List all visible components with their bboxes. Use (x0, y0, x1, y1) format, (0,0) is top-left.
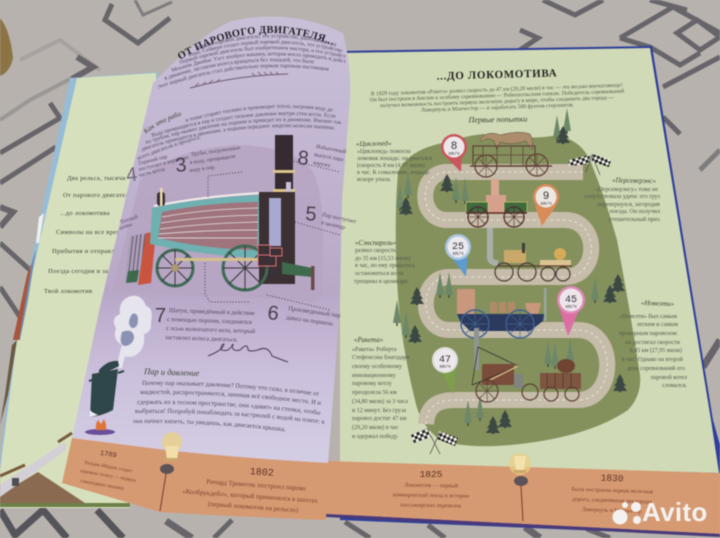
step 7 (155, 263, 330, 344)
label: Novelty: день соревнований его (627, 365, 685, 372)
label: Rocket: (29,20 мили) в час (352, 424, 399, 431)
step 8: Избыточный (316, 143, 347, 155)
trees (393, 108, 627, 434)
year 1830: 1830 (600, 473, 624, 484)
pin: 25 km/h: КМ/Ч (453, 251, 464, 257)
label: Cycloped: ломовая лошадь: он двигался (357, 156, 432, 162)
contents list: Два рельса, тысячи (67, 175, 126, 182)
lamp 1825 (509, 453, 531, 521)
contents list: ...до локомотива (60, 210, 110, 217)
pin: 47 km/h (432, 347, 458, 394)
paragraph: steam and pressure: она начнет кипеть, ты увидишь, как двигается крышка. (132, 419, 286, 432)
step 4: часть котла (138, 166, 166, 179)
step 8 (288, 143, 347, 172)
step 2 (119, 213, 139, 232)
year 1802: 1802 (249, 467, 274, 480)
step 3: 3 (174, 154, 188, 177)
label: Cycloped (356, 139, 432, 183)
ornament: swirl divider (208, 344, 288, 362)
icon: checkered flags, start (569, 154, 611, 175)
label: Sans Pareil: трещины в цилиндре. (354, 279, 410, 285)
text 1825: пассажирских перевозок (400, 502, 462, 510)
icon: gold object in the corner (0, 18, 13, 76)
ornament: laurel divider (190, 72, 288, 88)
pin: 25 km/h: 25 (452, 242, 464, 253)
paragraph: steam and pressure: сдержать их в тесном пространстве, они «давят» на стенки, чтобы (136, 400, 321, 415)
label: Novelty (619, 299, 687, 389)
pin: 9 km/h: КМ/Ч (541, 201, 552, 207)
firebox (125, 232, 156, 285)
contents list: Прибытия и отправления (52, 248, 128, 255)
contents list: Символы на все времена (56, 229, 131, 236)
label: Rocket: (34,80 мили) за 3 часа (352, 398, 408, 405)
text 1830: дорога, соединившая два города (572, 497, 652, 505)
lamp 1802 (160, 432, 182, 511)
pin: 45 km/h: КМ/Ч (566, 304, 577, 310)
label: Rocket: преодолела 56 км (352, 390, 397, 396)
intro paragraph, right page (369, 82, 625, 115)
label: Sans Pareil: развил скорость (355, 248, 396, 254)
step 8: 8 (296, 147, 310, 170)
text 1825: Локомотив — первый (404, 482, 458, 489)
paragraph: how it works (137, 104, 342, 160)
paragraph: steam and pressure: выбраться! Попробуй понаблюдать за кастрюлей с водой на плите: когда (134, 408, 325, 424)
step 5: Пар поступает (322, 212, 357, 225)
step 3: в воду, превращали (189, 154, 236, 166)
paragraph: how it works: двигатель приводится в движение, а поршни передают энергию колесам машины. (142, 124, 335, 152)
label: Novelty: «Новелти» (641, 299, 675, 308)
panel: orange timeline strip, left page (62, 432, 328, 520)
label: Rocket: и одержал победу. (352, 433, 399, 440)
step 7: Шатун, приведённый в действие (169, 307, 255, 317)
connecting rod (175, 258, 263, 261)
label: Sans Pareil: остановиться из-за (355, 271, 404, 277)
step 7: 7 (155, 305, 166, 327)
vehicle: Rocket (472, 328, 581, 402)
text 1825 (393, 481, 469, 510)
label: Sans Pareil: до 35 км (15,53 мили) (355, 255, 410, 262)
label: Perseverance: сопутствовала удача: его груз (585, 194, 661, 200)
contents list: Твой локомотив (44, 288, 92, 295)
step 3: воду в пар. (189, 164, 217, 174)
subheading: первые попытки: Первые попытки (468, 114, 527, 125)
label: Novelty: сломался. (662, 383, 687, 389)
label: Perseverance: поезда. Он получил (610, 209, 660, 215)
label: Novelty: он достигал скорости (625, 340, 681, 346)
label: Sans Pareil (354, 239, 415, 285)
step 4 (125, 153, 189, 187)
step 3: Трубы, погруженные (190, 144, 241, 158)
text 1830: Была построена первая железная (571, 487, 654, 495)
text 1789: Уильям Мёрдок создал (84, 461, 133, 474)
step 3 (174, 144, 242, 198)
label: Rocket: «Ракета» Роберта (352, 346, 397, 353)
pin: 25 km/h (445, 234, 471, 277)
wooden deck and platform at the page bottom (0, 433, 130, 507)
panel: left contents page (0, 72, 160, 508)
paragraph: steam and pressure (132, 380, 325, 432)
diagram: steam locomotive cross-section (125, 135, 314, 290)
heading: steam and pressure: Пар и давление (143, 366, 200, 378)
cylinder (258, 245, 282, 266)
illustration: pot on the flame (85, 361, 124, 435)
text 1802: (первый локомотив на рельсах) (208, 501, 299, 514)
step 6: 6 (266, 302, 280, 325)
step 7: с осью коленчатого вала, который (166, 325, 256, 335)
text 1789: самоходную машину (80, 479, 125, 492)
step 8: наружу (313, 160, 331, 169)
text 1830 (571, 487, 654, 515)
text 1830: Ливерпуль и Манчестер (582, 507, 642, 515)
heading: до локомотива: ...ДО ЛОКОМОТИВА (437, 67, 558, 83)
hill (396, 134, 640, 446)
step 6 (266, 302, 341, 328)
contents list: Поезда сегодня и завтра (48, 268, 122, 275)
paragraph: steam and pressure: жидкостей, распространяются, занимая всё свободное место. И их (140, 389, 322, 406)
label: Rocket: инновационному (352, 373, 396, 379)
label: Novelty: 8,45 км (27,95 мили) (630, 347, 682, 354)
green beam (282, 262, 312, 277)
intro paragraph, right page: Он был построен в Англии к особому соревнованию — Рейнхилльским гонкам. Победитель соревнований (370, 88, 624, 103)
pin: 45 km/h: 45 (565, 295, 577, 306)
watermark: Avito logo (612, 497, 708, 527)
pin: 47 km/h: КМ/Ч (440, 364, 451, 370)
label: Rocket: Стефенсона благодаря (352, 354, 409, 361)
paragraph: how it works: всего двигателя и процесса. (137, 136, 201, 160)
text 1789: паровую телегу — первую (80, 469, 137, 484)
step 5 (295, 203, 357, 235)
label: Cycloped: «Циклопед» (356, 139, 392, 148)
pin: 8 km/h: 8 (451, 141, 457, 153)
label: Novelty: в час! Однако на второй (622, 356, 684, 363)
text 1802: «Колбрукдейл», который применялся в шахтах (182, 488, 319, 505)
label: Rocket: и 12 минут. Без груза (352, 408, 406, 414)
text 1802: Ричард Тревитик построил парово (206, 479, 307, 493)
illustration: steam cloud (114, 296, 152, 368)
label: Novelty: «Новелти» был самым (619, 313, 677, 320)
vehicle: Sans Pareil (490, 228, 572, 281)
pin: 47 km/h: 47 (439, 355, 451, 366)
step 4: 4 (125, 164, 139, 187)
intro paragraph, left page: Этот первый двигатель стал действительно первым паровым настоящим (156, 64, 330, 90)
label: Rocket: паровоз достиг 47 км (352, 416, 407, 422)
vehicle: Perseverance (466, 179, 527, 227)
label: Perseverance: перевернулся, загородив (597, 202, 660, 208)
step 6: Произведенный пар (288, 305, 341, 319)
label: Novelty: паровой котел (651, 374, 687, 381)
chimney (259, 135, 295, 284)
step 4: поступает в верхнюю (138, 155, 189, 173)
label: Rocket: своему особенному (352, 363, 402, 370)
step 8: выпуск пара (314, 152, 344, 163)
text 1789 (80, 461, 137, 492)
label: Perseverance: утешительный приз. (609, 216, 661, 223)
step 7: заставлял колеса двигаться. (165, 334, 238, 344)
step 7: с помощью поршня, соединялся (167, 316, 252, 326)
callouts: numbered steps (119, 143, 357, 344)
contents list: От парового двигателя (63, 192, 132, 199)
paragraph: how it works: по трубам, пар окажет давление на поршни и приведет их в движение. Именно так (145, 118, 342, 144)
year 1825: 1825 (420, 469, 443, 480)
panel: purple curved left page (72, 16, 357, 464)
step 5: 5 (305, 203, 317, 226)
label: Cycloped: (скорость 8 км (4,97 мили) (357, 162, 425, 169)
label: Novelty: проворным паровозом: (619, 331, 678, 337)
intro paragraph, right page: получил возможность построить первую железную дорогу в мире, чтобы соединить два города — (380, 94, 615, 109)
label: Perseverance: «Персеверэнсу» тоже не (595, 187, 658, 193)
panel: orange timeline strip, right page (326, 453, 720, 537)
pin: 8 km/h: КМ/Ч (449, 151, 460, 157)
label: Perseverance: «Персеверэнс» (612, 176, 657, 185)
vehicle: Cycloped horse cart (470, 132, 552, 177)
label: Cycloped: «Циклопед» помогла (357, 149, 411, 155)
label: Novelty: легким и самым (637, 322, 678, 328)
label: Rocket: «Ракета» (354, 336, 384, 344)
label: Perseverance (585, 176, 661, 223)
intro paragraph, right page: Ливерпуль и Манчестер — и заработать 500 фунтов стерлингов. (421, 101, 575, 114)
wheels (157, 246, 267, 290)
pin: 45 km/h (557, 286, 585, 336)
paragraph: steam and pressure: Почему пар оказывает давление? Потому что газы, в отличие от (142, 380, 320, 396)
step 5: в цилиндр (321, 220, 346, 231)
label: Cycloped: в час. К сожалению, лошадь (357, 170, 429, 176)
label: Sans Pareil: в час, но ему пришлось (355, 263, 415, 269)
pin: 8 km/h (441, 134, 467, 172)
icon: checkered flags, finish (411, 428, 458, 454)
intro paragraph, left page: в движение, заставляя колеса вращаться без лошадей, это было (164, 57, 314, 80)
step 4: Горячий пар (138, 153, 168, 167)
step 2: огонь (119, 222, 134, 232)
step 6: давил на поршень (286, 314, 334, 328)
label: Sans Pareil: «Сэнспарель» (355, 239, 397, 247)
title: ОТ ПАРОВОГО ДВИГАТЕЛЯ... (177, 25, 333, 60)
text 1825: коммерческий поезд в истории (393, 491, 469, 500)
pin: 9 km/h: 9 (543, 191, 549, 203)
intro paragraph, right page: В 1829 году локомотив «Ракета» развил скорость до 47 км (29,20 мили) в час — это весьма впечатляюще! (371, 82, 623, 97)
road (425, 172, 607, 424)
intro paragraph, left page (156, 34, 346, 90)
intro paragraph, left page: Первый паровой двигатель, это устройство, работающее на (196, 34, 336, 50)
intro paragraph, left page: Томас Сейвери создал первый паровой двигатель, это устройство (186, 39, 343, 57)
contents list (44, 175, 132, 295)
panel: right page with blue cover edge (340, 46, 720, 536)
text 1802 (182, 479, 319, 514)
vehicle: Novelty (457, 288, 546, 338)
year 1789: 1789 (99, 450, 117, 460)
map: green hill with road and locomotives (393, 108, 640, 454)
boiler (150, 188, 260, 258)
darker engine panel (112, 145, 323, 302)
pin: 9 km/h (533, 184, 559, 226)
watermark: Avito logo: Avito (642, 497, 708, 527)
step 2: Теплый (119, 213, 139, 226)
label: Rocket: паровому котлу (352, 381, 392, 387)
label: Cycloped: вскоре упала. (357, 177, 392, 183)
label: Rocket (352, 336, 409, 440)
